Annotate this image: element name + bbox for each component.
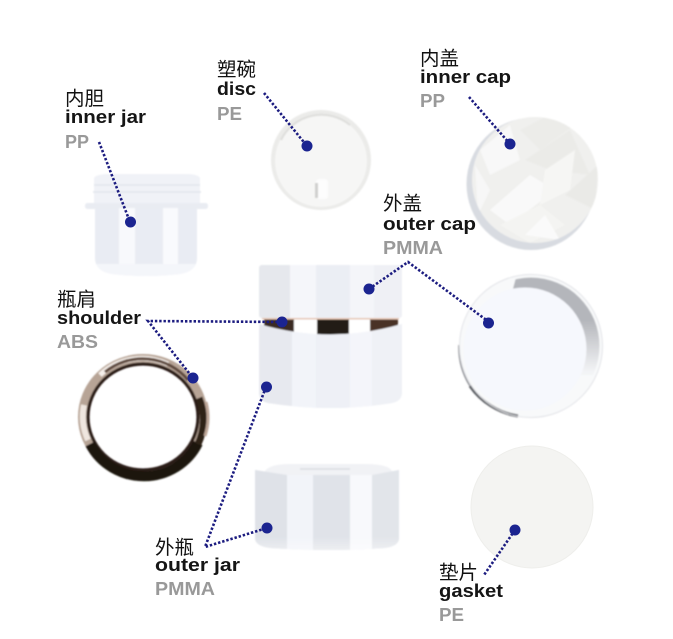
label: outer jar: PMMA <box>155 578 215 599</box>
label: inner cap: inner cap <box>420 66 511 87</box>
inner jar part <box>85 174 208 278</box>
gold band <box>262 316 399 336</box>
leader: gasket <box>484 524 520 575</box>
label: inner jar: 内胆 <box>65 88 104 110</box>
outer cap <box>259 265 402 318</box>
inner cap part <box>466 117 598 250</box>
label: inner cap <box>420 48 511 111</box>
outer cap open part <box>459 270 610 418</box>
label: outer jar: 外瓶 <box>155 537 194 559</box>
leader: inner cap <box>469 97 516 150</box>
shoulder ring part <box>83 358 208 476</box>
label: disc: 塑碗 <box>217 59 256 81</box>
label: gasket: 垫片 <box>439 562 478 584</box>
label: shoulder: shoulder <box>57 307 141 328</box>
label: outer cap <box>383 193 476 258</box>
leader: outer jar <box>205 382 272 547</box>
label: outer cap: outer cap <box>383 213 476 234</box>
label: outer cap: 外盖 <box>383 193 422 215</box>
label: shoulder: ABS <box>57 331 98 352</box>
label: inner cap: PP <box>420 91 445 111</box>
assembled jar <box>259 265 402 415</box>
label: inner jar: inner jar <box>65 106 146 127</box>
label: shoulder <box>57 289 141 352</box>
leader: shoulder <box>148 316 288 384</box>
label: disc: disc <box>217 78 256 99</box>
label: shoulder: 瓶肩 <box>57 289 96 311</box>
label: gasket <box>439 562 503 625</box>
disc part <box>271 110 371 210</box>
label: disc <box>217 59 256 124</box>
leader: outer cap <box>364 262 494 328</box>
label: outer cap: PMMA <box>383 237 443 258</box>
leader: disc <box>264 93 312 152</box>
label: gasket: PE <box>439 605 464 625</box>
leader: inner jar <box>99 142 136 228</box>
lower outer jar part <box>255 464 399 555</box>
label: disc: PE <box>217 104 242 124</box>
label: inner cap: 内盖 <box>420 48 459 70</box>
label: outer jar: outer jar <box>155 554 240 575</box>
label: inner jar <box>65 88 146 152</box>
jar body <box>258 324 402 408</box>
label: inner jar: PP <box>65 132 89 152</box>
label: outer jar <box>155 537 240 599</box>
label: gasket: gasket <box>439 580 503 601</box>
gasket part <box>471 446 593 568</box>
